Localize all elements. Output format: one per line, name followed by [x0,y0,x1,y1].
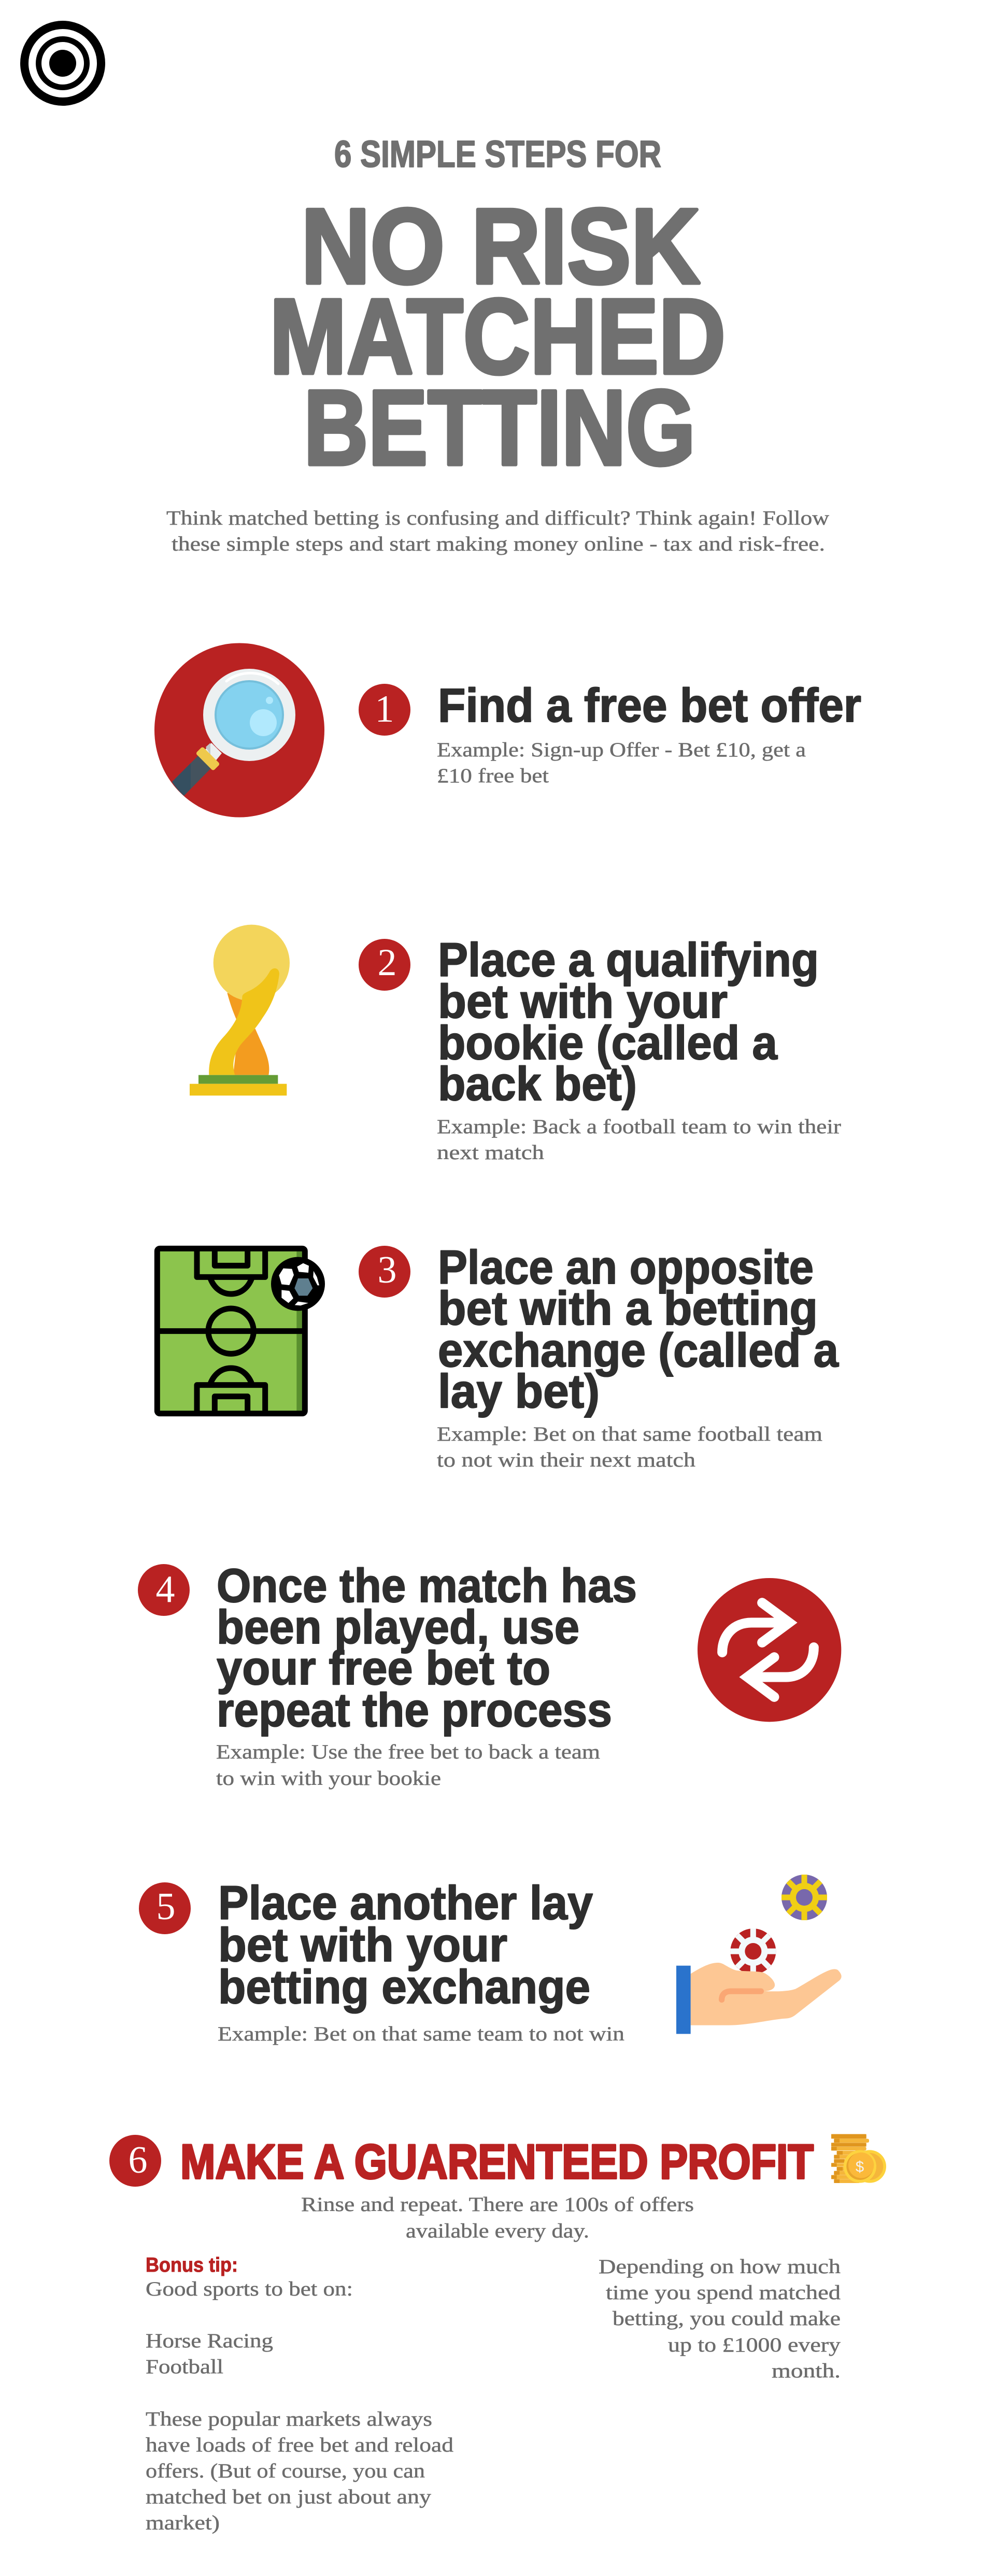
icon: trophy [190,925,290,1095]
text: bonus tip: Good sports to bet on: [146,2278,353,2300]
badge: number 4 [138,1564,190,1616]
heading: step 6: MAKE A GUARENTEED PROFIT [180,2134,814,2189]
example: step 1: Example: Sign-up Offer - Bet £10, get a [437,739,806,761]
badge: number 6: 6 [129,2139,147,2181]
badge: number 1 [359,684,410,736]
text: earnings note: time you spend matched [606,2282,841,2304]
intro text: these simple steps and start making money online - tax and risk-free. [172,533,825,555]
main title line 3: BETTING [304,368,695,487]
heading: step 3: lay bet) [438,1365,600,1418]
icon: gold coins [831,2134,886,2183]
heading: step 3 [438,1241,839,1418]
heading: step 4: been played, use [217,1601,579,1654]
text: rinse and repeat: Rinse and repeat. There are 100s of offers [301,2193,694,2216]
badge: number 5: 5 [157,1885,175,1928]
example: step 4 [216,1741,600,1790]
heading: step 3: bet with a betting [438,1282,818,1335]
badge: number 2 [359,939,410,991]
icon: repeat arrows [698,1578,841,1722]
text: bonus tip: market) [146,2512,220,2534]
badge: number 2: 2 [377,941,397,984]
main title line 2: MATCHED [269,277,726,396]
panel: step 5 [139,1875,842,2045]
panel: step 4 [138,1559,841,1790]
title block [269,134,726,487]
main title line 1: NO RISK [301,187,700,306]
heading: step 4: repeat the process [217,1684,612,1737]
text: bonus tip: Football [146,2356,223,2378]
example: step 1 [437,739,806,787]
example: step 2: next match [437,1142,544,1164]
heading: step 2: back bet) [438,1058,637,1110]
text: earnings note: Depending on how much [599,2256,841,2278]
heading: step 5: betting exchange [218,1961,590,2014]
heading: step 3: exchange (called a [438,1324,839,1377]
example: step 3: to not win their next match [437,1449,695,1471]
heading: step 4: your free bet to [217,1642,550,1695]
heading: step 2: Place a qualifying [438,934,819,987]
example: step 3 [437,1423,822,1471]
example: step 3: Example: Bet on that same football team [437,1423,822,1445]
icon: magnifying glass [154,643,324,817]
badge: number 1: 1 [375,688,394,730]
example: step 2 [437,1116,841,1164]
heading: step 3: Place an opposite [438,1241,814,1294]
panel: step 3 [157,1241,839,1471]
heading: step 2: bookie (called a [438,1017,778,1069]
text: bonus tip: matched bet on just about any [146,2486,432,2508]
icon: football pitch and ball [157,1248,325,1414]
text: bonus tip: offers. (But of course, you can [146,2460,425,2482]
text: bonus tip [146,2254,454,2534]
heading: step 4: Once the match has [217,1559,637,1612]
panel: step 2 [190,925,841,1164]
heading: step 5: Place another lay [218,1877,593,1930]
badge: number 4: 4 [155,1568,175,1611]
heading: step 1: Find a free bet offer [438,679,861,732]
example: step 4: Example: Use the free bet to back a team [216,1741,600,1763]
heading: step 2 [438,934,819,1110]
kicker heading: 6 SIMPLE STEPS FOR [334,134,661,175]
intro text [166,507,829,555]
heading: step 2: bet with your [438,975,728,1028]
example: step 5: Example: Bet on that same team to not win [218,2023,624,2045]
text: bonus tip: Horse Racing [146,2330,273,2352]
badge: number 6 [109,2135,161,2187]
heading: step 5: bet with your [218,1919,507,1972]
text: bonus tip: have loads of free bet and reload [146,2434,454,2456]
panel: step 1 [154,643,861,817]
icon: hand with betting chips [676,1875,842,2034]
panel: step 6 [109,2134,886,2534]
text: earnings note: up to £1000 every [668,2334,841,2356]
intro text: Think matched betting is confusing and difficult? Think again! Follow [166,507,829,529]
text: earnings note: betting, you could make [613,2307,841,2330]
badge: number 3: 3 [377,1249,397,1291]
example: step 4: to win with your bookie [216,1767,441,1790]
heading: step 4 [217,1559,637,1737]
icon: gold coins: $ [856,2158,864,2175]
badge: number 3 [359,1246,410,1298]
badge: number 5 [139,1882,191,1934]
heading: step 5 [218,1877,593,2014]
logo: concentric target [20,21,105,106]
text: rinse and repeat: available every day. [406,2220,589,2242]
example: step 1: £10 free bet [437,765,549,787]
text: rinse and repeat [301,2193,694,2242]
text: earnings note: month. [772,2360,841,2382]
text: earnings note [599,2256,841,2382]
example: step 2: Example: Back a football team to win their [437,1116,841,1138]
text: bonus tip: These popular markets always [146,2408,432,2430]
text: bonus tip: Bonus tip: [146,2254,238,2276]
